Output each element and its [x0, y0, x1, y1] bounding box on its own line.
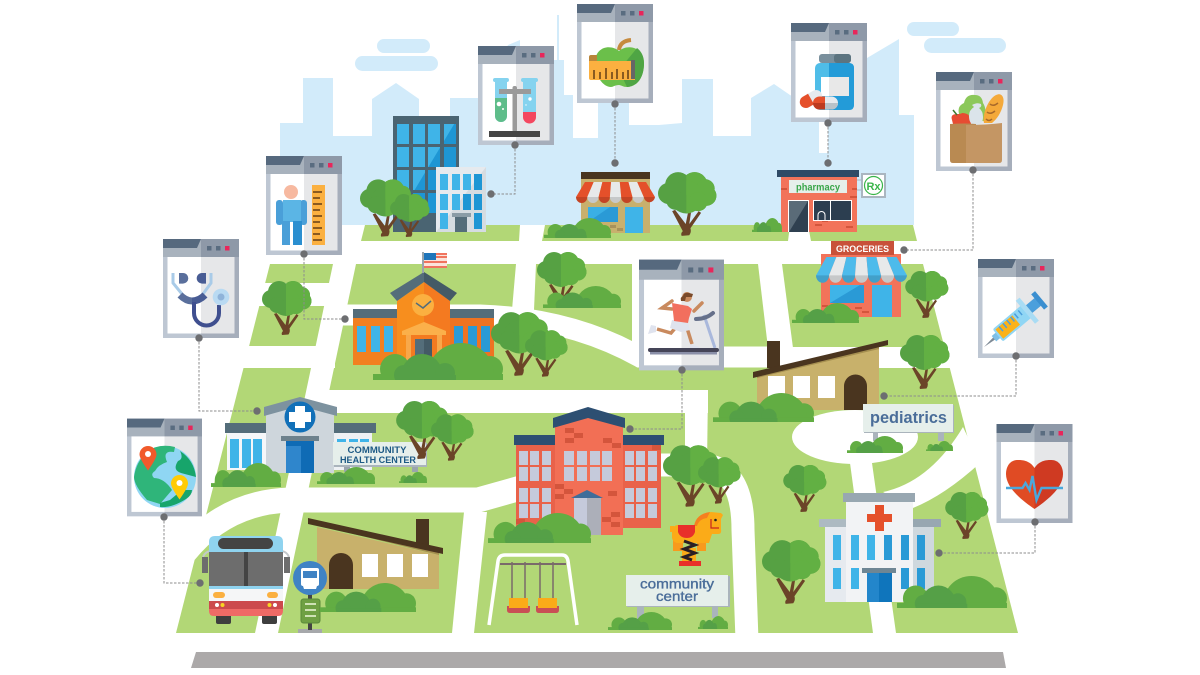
- road base bar: [191, 652, 1006, 668]
- red cross: [867, 505, 892, 531]
- window: treadmill: [639, 260, 724, 370]
- window: grocery bag: [936, 72, 1012, 171]
- connector dots: [160, 100, 1039, 587]
- community health center sign: HEALTH CENTER: [340, 455, 416, 466]
- bushes: [211, 218, 1007, 642]
- map pin orange: [140, 446, 156, 470]
- pediatrics sign: [863, 404, 954, 441]
- school: [353, 252, 494, 367]
- connector lines: [164, 104, 1035, 583]
- ground blocks: [176, 225, 1018, 633]
- window: syringe: [974, 259, 1054, 358]
- swing frame: [489, 555, 577, 625]
- medical cross badge: [284, 402, 316, 432]
- community center sign: community: [640, 576, 714, 592]
- clouds left: [355, 39, 438, 71]
- clouds right: [907, 22, 1006, 53]
- lower left house: [308, 518, 443, 589]
- window: stethoscope: [163, 239, 239, 338]
- bus stop sign: [293, 561, 327, 633]
- window: body measurement: [266, 156, 342, 255]
- curved roads: [185, 315, 790, 640]
- small office: [436, 167, 486, 232]
- map pin yellow: [171, 475, 188, 500]
- bus glyph: [301, 568, 319, 589]
- spring horse: [670, 512, 723, 566]
- hospital: [819, 493, 941, 602]
- trees: [262, 172, 988, 604]
- window: pill bottle: [791, 23, 867, 122]
- community health center sign: COMMUNITY: [348, 445, 407, 456]
- market store: [576, 172, 655, 233]
- pharmacy sign: pharmacy: [796, 182, 840, 194]
- swing set: [500, 562, 566, 613]
- groceries store: [816, 241, 907, 317]
- roads: [230, 264, 980, 633]
- window: test tubes: [478, 46, 554, 145]
- groceries sign: GROCERIES: [836, 244, 889, 255]
- flag: [422, 252, 447, 273]
- community center building: [514, 407, 664, 535]
- window: globe with pins: [127, 419, 202, 516]
- window: heart: [996, 424, 1072, 523]
- Rx sign: Rx: [866, 181, 881, 193]
- office tower: [393, 116, 459, 232]
- clock: [412, 294, 434, 316]
- capsules: [798, 88, 824, 110]
- skyline: [280, 15, 914, 225]
- community health center sign: [333, 442, 427, 472]
- community health center: [225, 397, 427, 473]
- bus: [202, 536, 290, 624]
- pharmacy building: [777, 170, 886, 232]
- window: apple and tape measure: [577, 4, 653, 103]
- pediatrics house: [753, 340, 888, 410]
- pediatrics sign: pediatrics: [870, 408, 947, 427]
- community center sign: center: [656, 588, 698, 604]
- community center sign: [626, 575, 730, 619]
